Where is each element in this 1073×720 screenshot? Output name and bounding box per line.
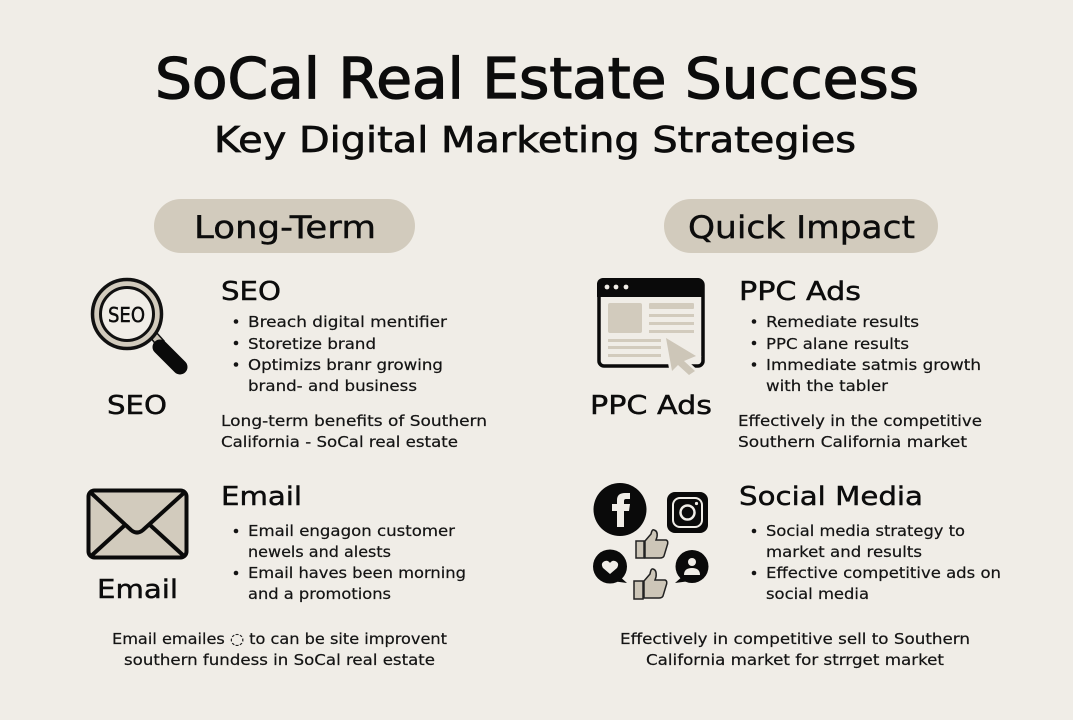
note: Social Media xyxy=(620,630,970,669)
icon: magnifying glass xyxy=(92,280,180,367)
bullet list: Social Media: market and results xyxy=(766,543,922,561)
icon: profile bubble xyxy=(675,550,708,583)
note: PPC Ads: Southern California market xyxy=(738,433,967,451)
note: SEO: Long-term benefits of Southern xyxy=(221,412,487,430)
pill: Long-Term: Long-Term xyxy=(194,210,376,246)
bullet list: PPC Ads: Remediate results xyxy=(766,313,919,331)
icon: magnifying glass: SEO xyxy=(108,303,145,327)
pill: Quick Impact xyxy=(664,199,938,253)
title: SoCal Real Estate Success xyxy=(155,47,919,112)
bullet list: PPC Ads: PPC alane results xyxy=(766,335,909,353)
note: SEO xyxy=(221,412,487,451)
icon: thumbs up top xyxy=(636,530,668,558)
pill: Quick Impact: Quick Impact xyxy=(688,210,915,246)
bullet list: SEO: Optimizs branr growing xyxy=(248,356,443,374)
icon: Facebook xyxy=(594,483,646,536)
bullet list: Social Media xyxy=(752,522,1001,603)
bullet list: SEO: Storetize brand xyxy=(248,335,376,353)
bullet list: Email xyxy=(234,522,466,603)
note: Email xyxy=(112,630,447,669)
bullet list: Email: newels and alests xyxy=(248,543,391,561)
subtitle: Key Digital Marketing Strategies xyxy=(214,120,856,161)
panel: Email xyxy=(88,482,466,669)
icon: heart bubble xyxy=(593,550,627,584)
heading: Email: Email xyxy=(221,482,302,512)
bullet list: Email: and a promotions xyxy=(248,585,391,603)
heading: SEO: SEO xyxy=(221,277,281,307)
icon: Instagram xyxy=(667,492,708,533)
panel: PPC Ads xyxy=(590,277,982,451)
note: Email: southern fundess in SoCal real estate xyxy=(124,651,435,669)
bullet list: SEO: brand- and business xyxy=(248,377,417,395)
bullet list: Social Media: Effective competitive ads on xyxy=(766,564,1001,582)
heading: Social Media: Social Media xyxy=(739,482,923,512)
bullet list: PPC Ads: with the tabler xyxy=(766,377,889,395)
icon: envelope xyxy=(88,490,186,558)
note: PPC Ads: Effectively in the competitive xyxy=(738,412,982,430)
icon: thumbs up bottom xyxy=(634,569,667,599)
bullet list: Email: Email engagon customer xyxy=(248,522,456,540)
note: Social Media: Effectively in competitive sell to Southern xyxy=(620,630,970,648)
icon label: SEO: SEO xyxy=(107,391,167,421)
heading: PPC Ads: PPC Ads xyxy=(739,277,861,307)
bullet list: PPC Ads xyxy=(752,313,981,395)
bullet list: Social Media: social media xyxy=(766,585,869,603)
note: PPC Ads xyxy=(738,412,982,451)
pill: Long-Term xyxy=(154,199,415,253)
bullet list: Social Media: Social media strategy to xyxy=(766,522,965,540)
icon: browser with cursor xyxy=(597,278,704,375)
bullet list: PPC Ads: Immediate satmis growth xyxy=(766,356,981,374)
icon label: Email: Email xyxy=(97,575,178,605)
bullet list: SEO: Breach digital mentifier xyxy=(248,313,448,331)
note: Email: Email emailes ◌ to can be site improvent xyxy=(112,630,447,648)
note: Social Media: California market for strrget market xyxy=(646,651,944,669)
note: SEO: California - SoCal real estate xyxy=(221,433,458,451)
icon: social media cluster xyxy=(593,483,708,599)
panel: Social Media xyxy=(593,482,1001,669)
panel: SEO xyxy=(92,277,487,451)
icon label: PPC Ads: PPC Ads xyxy=(590,391,712,421)
bullet list: SEO xyxy=(234,313,448,395)
bullet list: Email: Email haves been morning xyxy=(248,564,466,582)
